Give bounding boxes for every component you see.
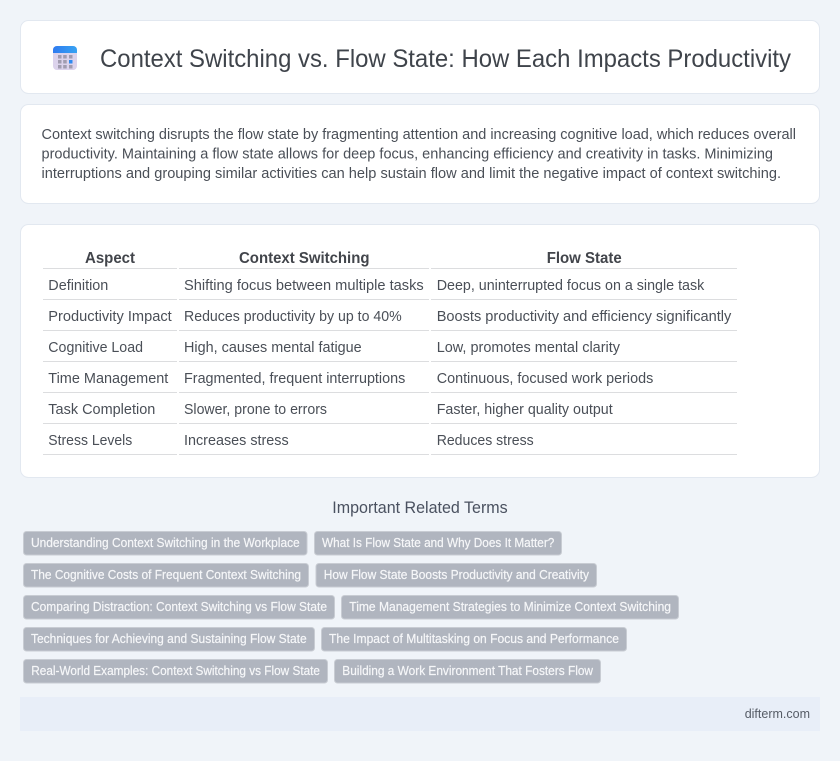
table row: Productivity Impact: Boosts productivity and efficiency significantly (437, 308, 732, 325)
table row: Time Management: Continuous, focused work periods (437, 370, 653, 387)
footer source text: difterm.com (745, 706, 810, 721)
footer (20, 697, 820, 731)
text block: description (42, 126, 796, 182)
tag: Time Management Strategies to Minimize Context Switching (349, 600, 671, 614)
table row: Productivity Impact (43, 308, 737, 331)
title: Context Switching vs. Flow State: How Each Impacts Productivity (100, 45, 791, 73)
tag: Understanding Context Switching in the Workplace (31, 536, 300, 550)
text block: description: interruptions and grouping similar activities can help sustain flow and limit the negative impact of context switching. (42, 165, 781, 182)
tag (24, 564, 308, 587)
table row: Task Completion: Slower, prone to errors (184, 401, 327, 418)
table row: Task Completion: Faster, higher quality output (437, 401, 613, 418)
table row: Cognitive Load: High, causes mental fatigue (184, 339, 362, 356)
tag (24, 628, 314, 651)
table row: Definition: Shifting focus between multiple tasks (184, 277, 424, 294)
table row: Productivity Impact: Reduces productivity by up to 40% (184, 308, 402, 325)
table header (43, 250, 737, 269)
text block: description: productivity. Maintaining a flow state allows for deep focus, enhancing efficiency and creativity in tasks. Minimizing (42, 146, 773, 162)
table row: Definition: Deep, uninterrupted focus on a single task (437, 277, 705, 294)
table row: Cognitive Load: Low, promotes mental clarity (437, 339, 620, 356)
text block: description: Context switching disrupts the flow state by fragmenting attention and increasing cognitive load, which reduces overall (42, 126, 796, 143)
table row: Stress Levels: Increases stress (184, 432, 289, 449)
table row: Productivity Impact: Productivity Impact (48, 308, 173, 325)
tag (334, 660, 600, 683)
tag: How Flow State Boosts Productivity and Creativity (324, 568, 590, 582)
tag (24, 660, 328, 683)
panel: header (20, 20, 820, 94)
table row: Cognitive Load: Cognitive Load (48, 339, 143, 356)
heading: related terms: Important Related Terms (332, 499, 508, 517)
table header: Context Switching (239, 250, 370, 267)
table row: Definition: Definition (48, 277, 108, 294)
tag (316, 564, 596, 587)
tag: The Cognitive Costs of Frequent Context Switching (31, 568, 301, 582)
panel: comparison table (20, 224, 820, 478)
tag: Building a Work Environment That Fosters Flow (342, 664, 594, 678)
table header: Flow State (547, 250, 622, 267)
tag: Real-World Examples: Context Switching vs Flow State (31, 664, 320, 678)
table row: Stress Levels: Stress Levels (48, 432, 132, 449)
tag (322, 628, 626, 651)
tag (24, 532, 307, 555)
table row: Stress Levels (43, 432, 737, 455)
table row: Task Completion (43, 401, 737, 424)
tag: Techniques for Achieving and Sustaining Flow State (31, 632, 307, 646)
tag: What Is Flow State and Why Does It Matter? (322, 536, 554, 550)
panel: description (20, 104, 820, 204)
tag (314, 532, 562, 555)
tag (24, 596, 334, 619)
table row: Task Completion: Task Completion (48, 401, 155, 418)
tag: The Impact of Multitasking on Focus and Performance (329, 632, 619, 646)
panel: related term tags (24, 532, 678, 683)
table header: Aspect (85, 250, 136, 267)
tag: Comparing Distraction: Context Switching vs Flow State (31, 600, 327, 614)
table row: Time Management: Time Management (48, 370, 169, 387)
table row: Time Management: Fragmented, frequent interruptions (184, 370, 405, 387)
icon: calendar (53, 46, 77, 70)
tag (342, 596, 678, 619)
table row: Time Management (43, 370, 737, 393)
table row: Stress Levels: Reduces stress (437, 432, 534, 449)
table row: Definition (43, 277, 737, 300)
table row: Cognitive Load (43, 339, 737, 362)
